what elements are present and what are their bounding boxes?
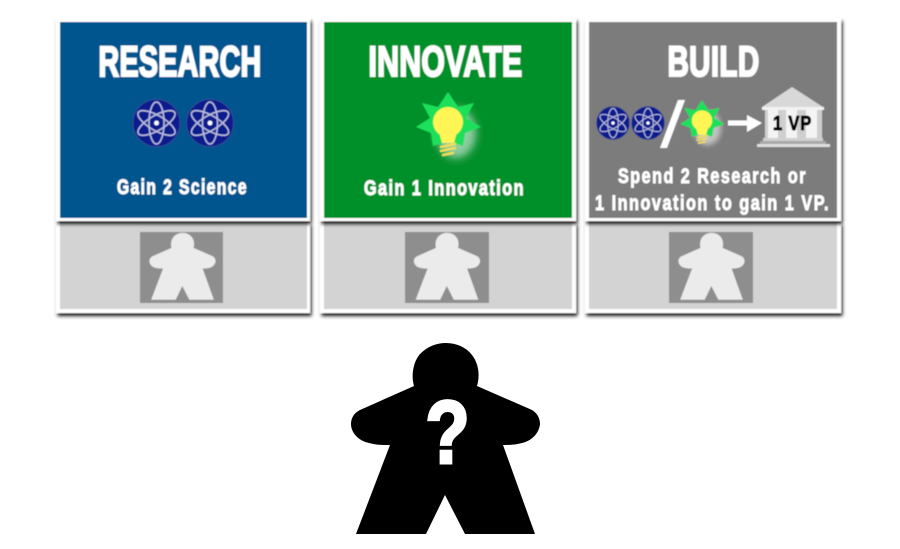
worker slot: innovate xyxy=(320,222,576,313)
text: build rule: Spend 2 Research or xyxy=(618,164,807,188)
build action card xyxy=(585,18,841,221)
text: build rule: 1 Innovation to gain 1 VP. xyxy=(595,191,830,215)
icon: black meeple with question mark xyxy=(351,343,540,534)
heading: build: BUILD xyxy=(668,38,760,86)
icon: black meeple with question mark: ? xyxy=(425,383,470,483)
heading: innovate: INNOVATE xyxy=(368,38,522,86)
innovate action card xyxy=(320,18,576,221)
icon: small light bulb xyxy=(680,100,724,145)
heading: research: RESEARCH xyxy=(98,38,262,86)
research action card xyxy=(56,18,310,221)
icon: two science atoms xyxy=(597,107,664,139)
icon: temple 1 VP xyxy=(757,87,830,147)
text: gain science: Gain 2 Science xyxy=(117,175,248,199)
icon: slash xyxy=(660,100,685,148)
icon: light bulb xyxy=(416,92,481,158)
worker slot: research xyxy=(56,222,310,313)
panel: innovate xyxy=(320,18,576,313)
text: build rule xyxy=(595,164,830,215)
icon: temple 1 VP: 1 VP xyxy=(773,113,812,135)
arrow xyxy=(728,115,762,132)
panel: research xyxy=(56,18,310,313)
icon: two science atoms xyxy=(133,100,234,146)
panel: build xyxy=(585,18,841,313)
text: gain innovation: Gain 1 Innovation xyxy=(364,176,525,200)
worker slot: build xyxy=(585,222,841,313)
